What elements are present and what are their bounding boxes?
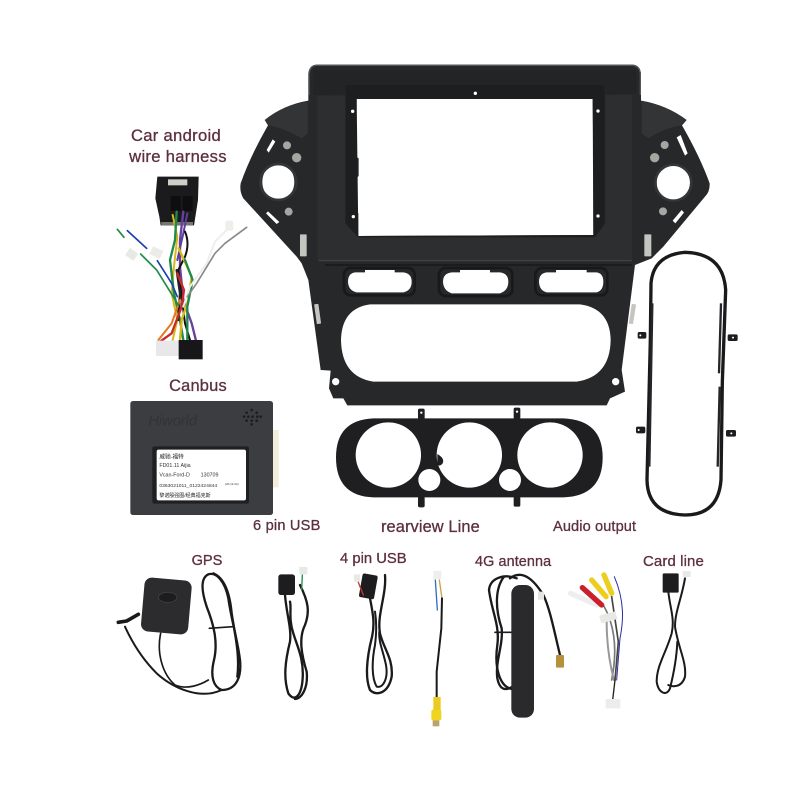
panel: dash frame	[240, 65, 710, 405]
heading: wire harness label line 2: wire harness	[128, 147, 227, 166]
icon: 4G antenna	[489, 575, 564, 718]
label: GPS: GPS	[192, 553, 223, 569]
icon: wire harness	[117, 177, 247, 359]
label: 4G antenna: 4G antenna	[475, 554, 551, 570]
heading: canbus label: Canbus	[169, 377, 227, 395]
metal clips	[300, 234, 651, 324]
icon: canbus box: 0363021011_0122424844	[159, 483, 217, 489]
icon: canbus box: 黎诺殷强图/经典福克斯	[159, 492, 211, 499]
icon: 4 pin USB cable	[354, 573, 392, 693]
heading: wire harness label: Car android	[131, 126, 221, 145]
frame rim	[309, 65, 640, 95]
icon: canbus box: FD01.11 Aijia	[159, 463, 191, 469]
icon: canbus box	[130, 401, 279, 515]
vent surrounds	[344, 268, 607, 296]
wing rings	[260, 164, 296, 200]
bezel tabs	[418, 408, 520, 507]
icon: card line cable	[657, 571, 691, 693]
icon: rearview line	[431, 571, 442, 726]
grey bosses	[283, 141, 669, 216]
label: 4 pin USB: 4 pin USB	[340, 551, 407, 567]
icon: canbus box: Hiworld	[148, 414, 198, 430]
icon: canbus box: 130709	[201, 473, 218, 479]
label: Card line: Card line	[643, 553, 704, 570]
icon: 6 pin USB cable	[278, 567, 308, 699]
icon: canbus box: Vcan-Ford-D	[159, 473, 190, 479]
speaker dots	[243, 409, 262, 426]
icon: audio output cable	[571, 575, 623, 708]
screw holes	[332, 92, 619, 385]
panel: three-hole bezel	[336, 408, 603, 507]
icon: GPS antenna	[118, 573, 240, 694]
icon: canbus box: (20.12.24)	[225, 482, 239, 486]
label: Audio output: Audio output	[553, 519, 636, 535]
label: rearview Line: rearview Line	[381, 518, 480, 536]
panel: oval trim ring	[636, 252, 738, 515]
label: 6 pin USB: 6 pin USB	[253, 518, 321, 534]
icon: canbus box: 威驰-福特	[159, 452, 184, 460]
